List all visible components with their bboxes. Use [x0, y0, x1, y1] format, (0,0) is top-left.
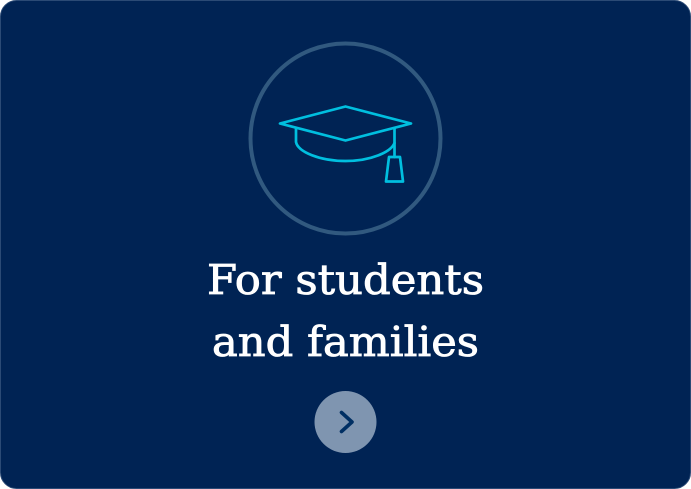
heading: For students: [207, 256, 484, 304]
icon: circle outline: [250, 44, 440, 234]
icon: graduation cap: [280, 106, 411, 182]
heading: [207, 256, 484, 366]
heading: and families: [212, 318, 479, 366]
button: next arrow: [314, 391, 376, 453]
